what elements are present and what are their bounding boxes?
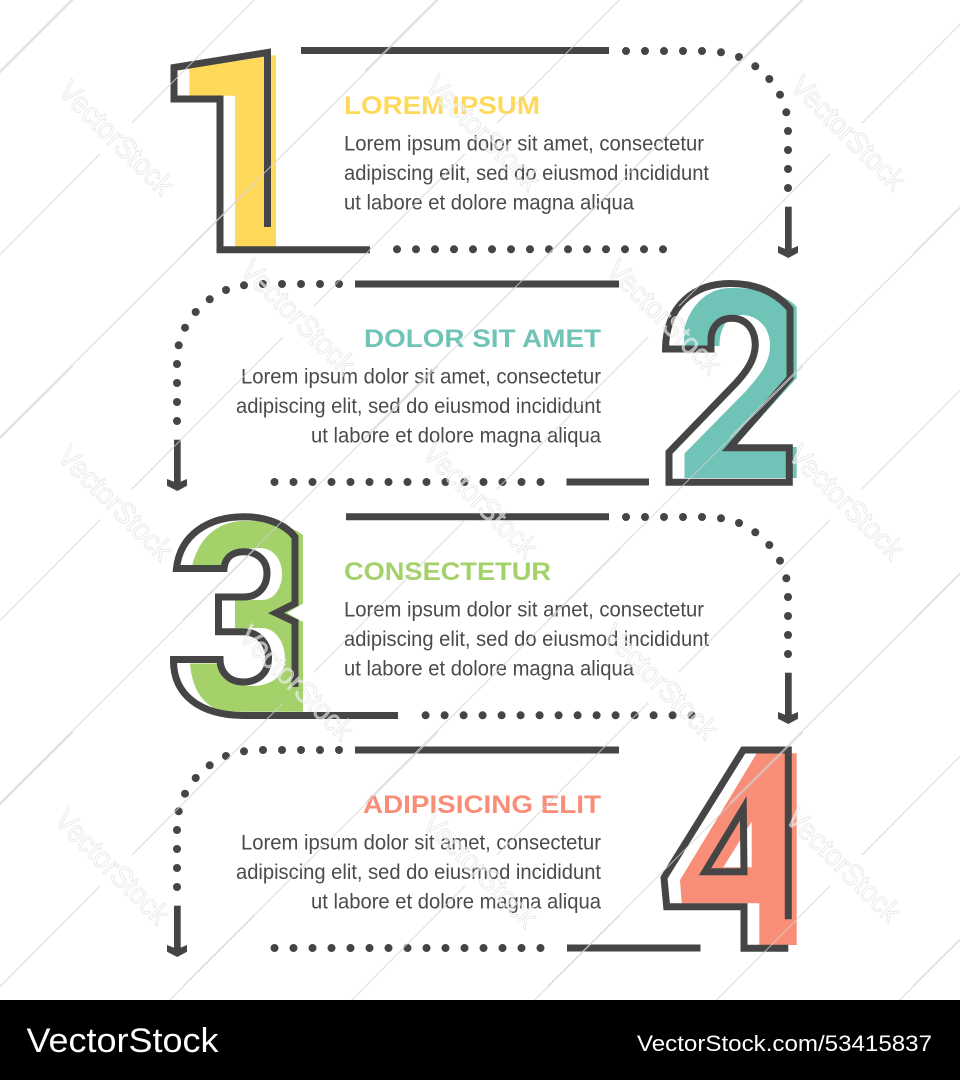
text block: step 1: Lorem ipsum dolor sit amet, consectetur [344, 132, 704, 156]
text block: step 2: adipiscing elit, sed do eiusmod incididunt [236, 395, 601, 418]
text block: step 4: ut labore et dolore magna aliqua [311, 890, 601, 913]
footer bar: VectorStock.com/53415837 [637, 1031, 932, 1056]
panel: step 3 [173, 513, 798, 724]
watermark overlay: VectorStock [416, 806, 544, 935]
watermark overlay: VectorStock [596, 618, 724, 747]
number 1 [174, 52, 370, 250]
heading: consectetur: CONSECTETUR [344, 558, 551, 586]
text block: step 3: ut labore et dolore magna aliqua [344, 657, 634, 680]
watermark overlay: VectorStock [779, 801, 907, 930]
arrow: step 4 end [167, 906, 187, 957]
connector: top line, dotted curve [301, 47, 792, 192]
connector: top line, dotted curve [173, 746, 619, 891]
watermark overlay: VectorStock [48, 803, 176, 932]
text block: step 4: adipiscing elit, sed do eiusmod incididunt [236, 861, 601, 884]
text block: step 4: Lorem ipsum dolor sit amet, consectetur [241, 832, 601, 854]
bottom dotted and solid line [274, 944, 700, 952]
text block: step 2: Lorem ipsum dolor sit amet, consectetur [241, 366, 601, 388]
panel: step 4 [167, 746, 797, 957]
connector: top line, dotted curve [173, 280, 619, 425]
watermark overlay: VectorStock [234, 253, 362, 382]
panel: step 1 [174, 47, 798, 258]
text block: step 2: ut labore et dolore magna aliqua [311, 424, 601, 447]
arrow: step 2 to 3 [167, 440, 187, 491]
number 3 [173, 517, 398, 716]
text block: step 1 [344, 132, 709, 214]
watermark overlay: VectorStock [600, 253, 728, 382]
bottom dotted line [426, 711, 694, 719]
text block: step 3: adipiscing elit, sed do eiusmod incididunt [344, 628, 709, 651]
heading: adipisicing elit: ADIPISICING ELIT [363, 791, 601, 819]
text block: step 3 [344, 598, 709, 680]
text block: step 4 [236, 832, 601, 913]
heading: lorem ipsum: LOREM IPSUM [344, 92, 540, 120]
number 4 [664, 750, 797, 948]
text block: step 1: adipiscing elit, sed do eiusmod incididunt [344, 162, 709, 185]
panel: step 2 [167, 280, 797, 491]
watermark overlay: VectorStock [52, 74, 180, 203]
arrow: step 1 to 2 [778, 207, 798, 258]
footer bar: VectorStock [26, 1022, 220, 1060]
text block: step 3: Lorem ipsum dolor sit amet, consectetur [344, 598, 704, 622]
watermark overlay: VectorStock [784, 69, 912, 198]
arrow: step 3 to 4 [778, 673, 798, 724]
heading: dolor sit amet: DOLOR SIT AMET [364, 325, 601, 353]
bottom dotted line [397, 245, 665, 253]
text block: step 1: ut labore et dolore magna aliqua [344, 191, 634, 214]
footer bar [0, 1000, 960, 1080]
watermark overlay: VectorStock [419, 69, 547, 198]
connector: top line, dotted curve [346, 513, 792, 658]
text block: step 2 [236, 366, 601, 447]
number 2 [666, 284, 797, 482]
watermark overlay: VectorStock [416, 436, 544, 565]
watermark overlay: VectorStock [782, 438, 910, 567]
bottom dotted and solid line [274, 478, 649, 486]
watermark overlay: VectorStock [232, 619, 360, 748]
watermark overlay: VectorStock [51, 439, 179, 568]
